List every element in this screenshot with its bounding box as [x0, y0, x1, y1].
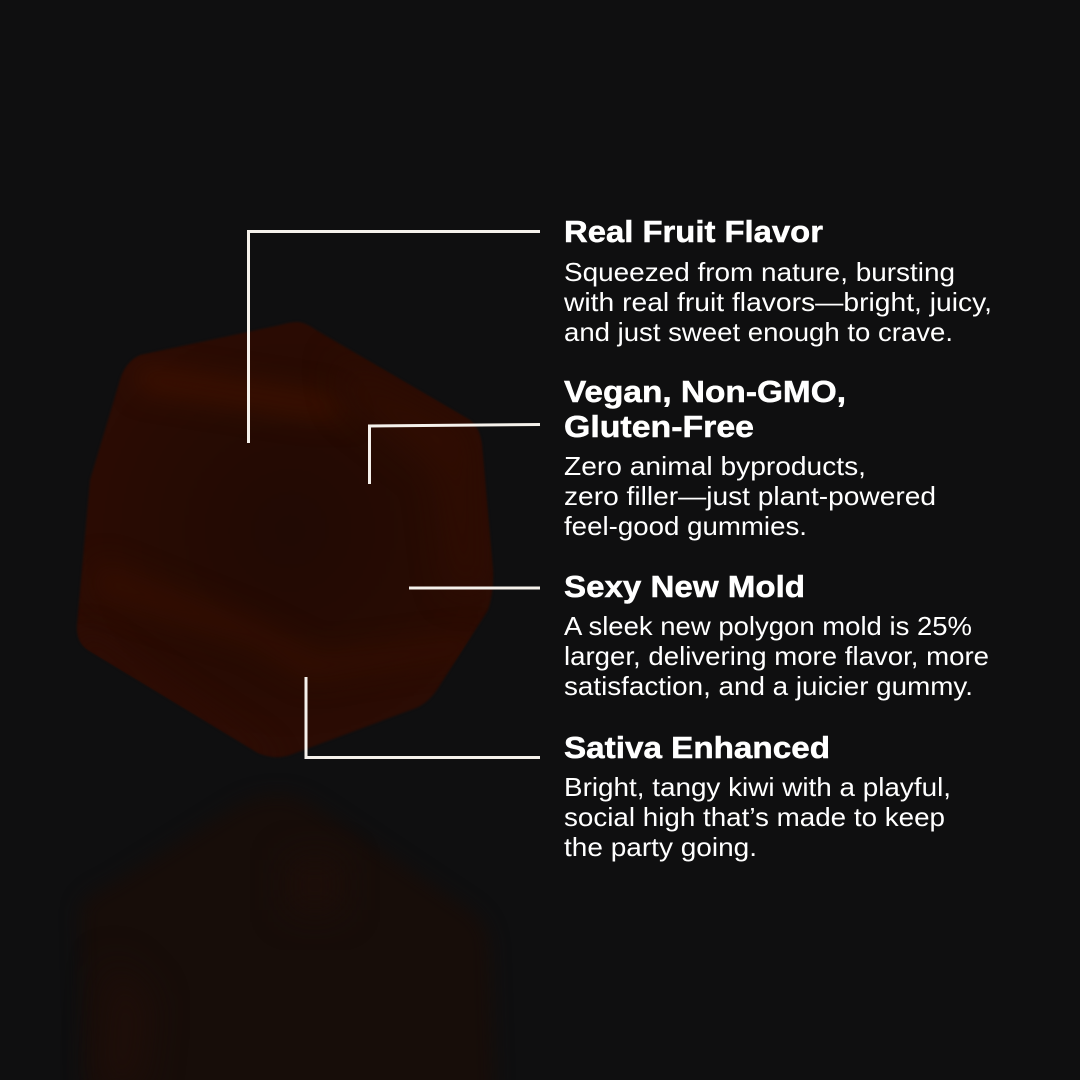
feature: vegan, non-gmo, gluten-free: Vegan, Non-GMO, [564, 374, 846, 409]
feature: vegan, non-gmo, gluten-free: feel-good gummies. [564, 511, 807, 541]
feature: real fruit flavor: Real Fruit Flavor [564, 214, 823, 249]
feature: real fruit flavor: with real fruit flavors—bright, juicy, [563, 287, 992, 317]
feature: sexy new mold: larger, delivering more flavor, more [564, 641, 989, 671]
feature: sativa enhanced: Bright, tangy kiwi with a playful, [564, 772, 951, 802]
feature: vegan, non-gmo, gluten-free: Gluten-Free [564, 409, 754, 444]
feature: sexy new mold: Sexy New Mold [564, 569, 805, 604]
gummy [70, 322, 493, 770]
feature: real fruit flavor: Squeezed from nature, bursting [564, 257, 955, 287]
feature: real fruit flavor: and just sweet enough to crave. [564, 317, 953, 347]
feature: sativa enhanced: social high that’s made to keep [564, 802, 945, 832]
feature: real fruit flavor [563, 214, 992, 347]
callout line: sexy new mold [409, 586, 540, 590]
callout line: real fruit flavor [248, 232, 540, 443]
feature: sativa enhanced: the party going. [564, 832, 757, 862]
feature: sexy new mold [564, 569, 989, 701]
feature: sexy new mold: satisfaction, and a juicier gummy. [564, 671, 973, 701]
feature: vegan, non-gmo, gluten-free [564, 374, 936, 541]
feature: vegan, non-gmo, gluten-free: Zero animal byproducts, [564, 451, 866, 481]
callout line: sativa enhanced [306, 677, 540, 758]
feature: vegan, non-gmo, gluten-free: zero filler—just plant-powered [564, 481, 936, 511]
callout line: vegan [370, 424, 540, 484]
feature: sativa enhanced: Sativa Enhanced [564, 730, 830, 765]
gummy reflection [80, 794, 495, 1080]
feature: sexy new mold: A sleek new polygon mold is 25% [564, 611, 972, 641]
feature: sativa enhanced [564, 730, 951, 862]
